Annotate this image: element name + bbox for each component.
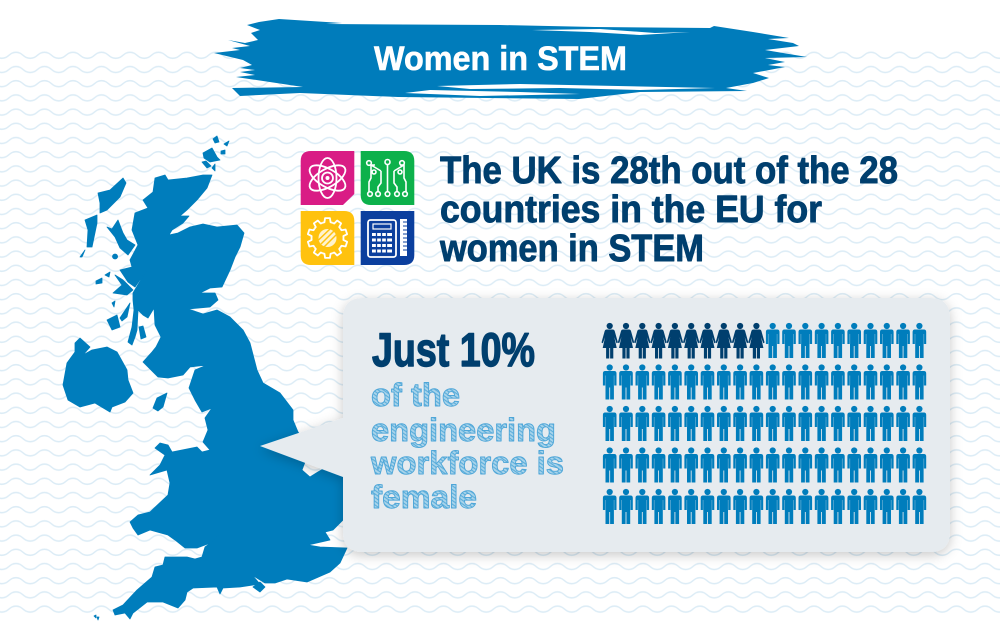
- Orkney: [203, 148, 220, 162]
- heading: UK ranking: The UK is 28th out of the 28: [440, 150, 898, 192]
- Isle of Man: [153, 393, 167, 411]
- title brush banner: [214, 19, 807, 99]
- icon: engineering gear: [301, 211, 354, 265]
- Skye: [107, 220, 135, 255]
- Arran: [139, 326, 146, 339]
- Islay: [107, 315, 120, 330]
- statistic description: [370, 377, 564, 515]
- small northern islands: [94, 136, 229, 620]
- title: Women in STEM: [374, 40, 627, 78]
- statistic headline: Just 10%: [372, 323, 535, 376]
- statistic description: female: [371, 479, 477, 515]
- row 4: [603, 447, 926, 482]
- statistic description: of the: [371, 377, 460, 413]
- Isle of Wight: [253, 582, 265, 592]
- row 3: [603, 406, 926, 441]
- icon: technology circuit: [361, 151, 414, 205]
- statistic description: workforce is: [370, 445, 564, 481]
- row 1: [602, 323, 926, 358]
- icon: maths calculator and ruler: [361, 211, 414, 265]
- Barra: [80, 250, 85, 257]
- statistic description: engineering: [371, 412, 556, 448]
- heading: UK ranking: [439, 150, 898, 270]
- Uist: [85, 215, 97, 247]
- heading: UK ranking: women in STEM: [439, 228, 704, 270]
- icon: science atom: [301, 151, 354, 205]
- panel: callout: [260, 298, 950, 552]
- Mull: [113, 275, 133, 295]
- Lewis: [98, 178, 126, 213]
- row 2: [603, 364, 926, 400]
- Northern Ireland: [63, 338, 133, 412]
- UK map: [63, 136, 365, 620]
- Great Britain mainland: [113, 175, 365, 619]
- row 5: [603, 489, 926, 524]
- Jura: [120, 303, 130, 321]
- pictogram: 10 percent women: [602, 323, 926, 524]
- heading: UK ranking: countries in the EU for: [440, 189, 822, 231]
- STEM icon group: [301, 151, 414, 265]
